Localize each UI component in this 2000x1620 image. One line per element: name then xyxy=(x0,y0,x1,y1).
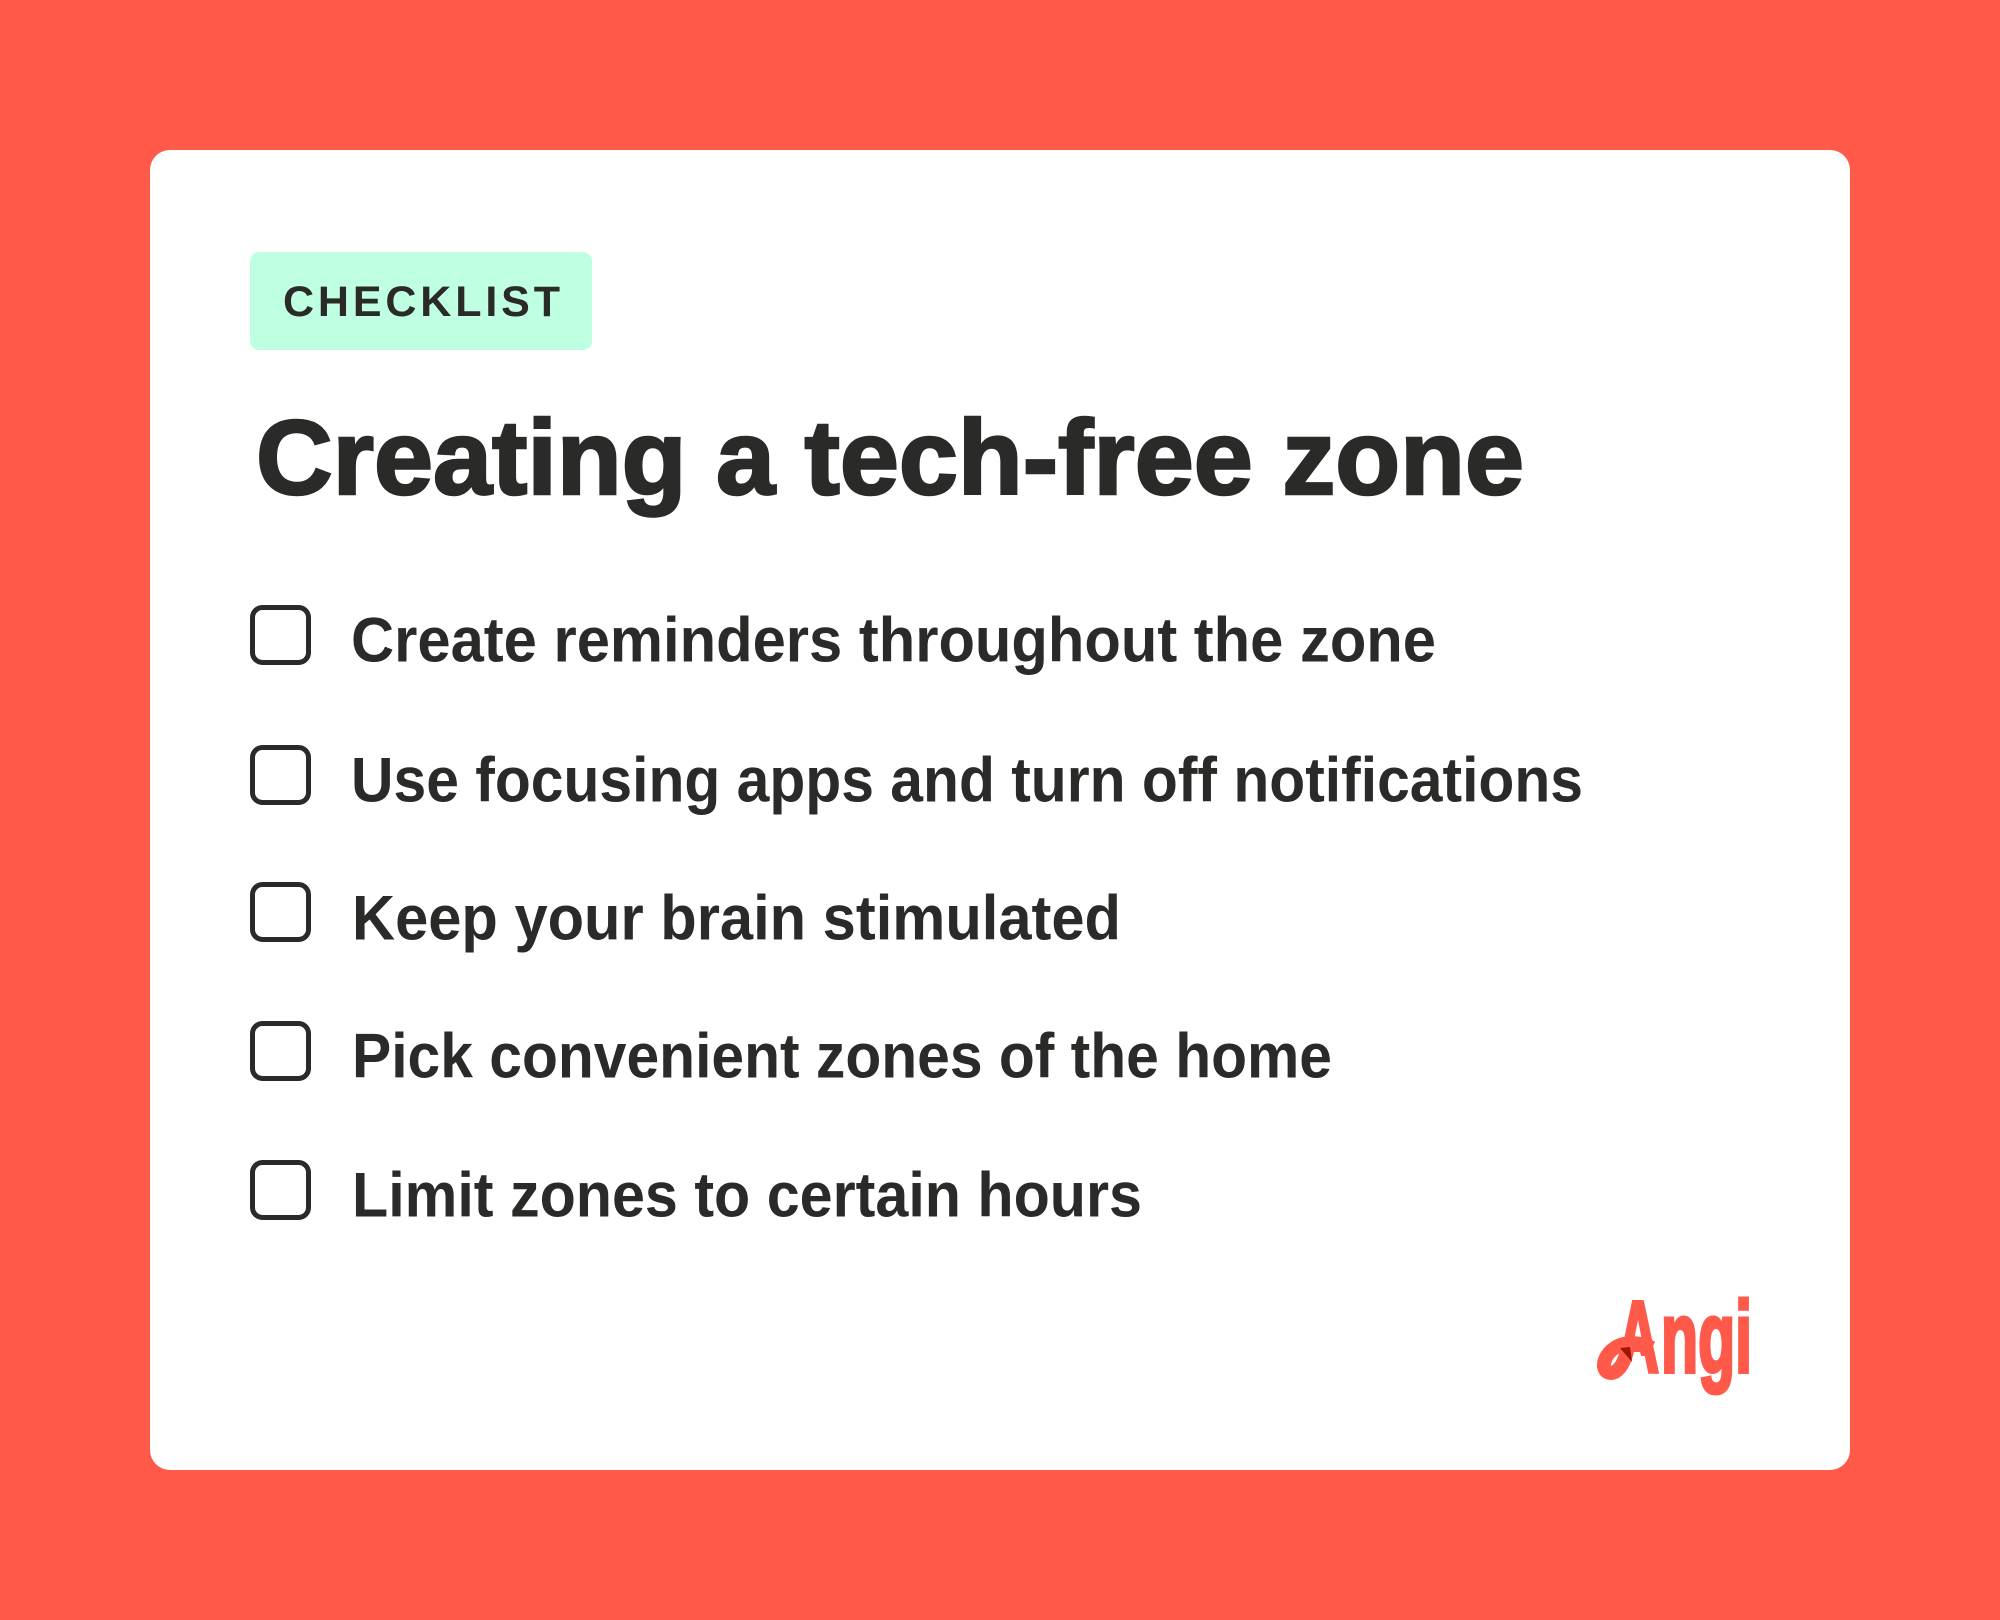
badge: checklist xyxy=(250,252,592,350)
logo: Angi: ngi xyxy=(1661,1282,1752,1394)
checklist item 4: Pick convenient zones of the home xyxy=(352,1022,1332,1092)
logo: Angi: A xyxy=(1617,1282,1659,1394)
badge: checklist: CHECKLIST xyxy=(283,278,560,326)
panel: checklist card xyxy=(150,150,1850,1470)
checklist item 2: Use focusing apps and turn off notifications xyxy=(351,746,1583,816)
title: Creating a tech-free zone xyxy=(256,399,1524,517)
checklist item 3: Keep your brain stimulated xyxy=(352,884,1121,954)
checklist item 5: Limit zones to certain hours xyxy=(352,1160,1142,1230)
checklist item 1: Create reminders throughout the zone xyxy=(351,606,1436,676)
logo: Angi xyxy=(1604,1282,1752,1394)
